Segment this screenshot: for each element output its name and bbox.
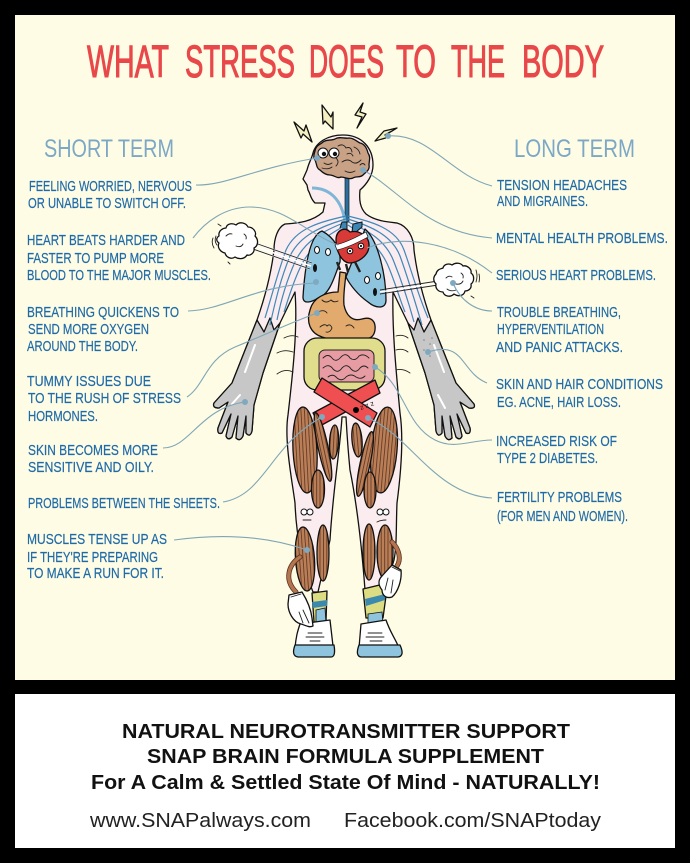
text: skin becomes: SKIN BECOMES MORE — [28, 442, 158, 459]
left glove — [288, 592, 313, 627]
footer link: website: www.SNAPalways.com — [89, 809, 311, 832]
footer line: neurotransmitter support: NATURAL NEUROTRANSMITTER SUPPORT — [122, 720, 570, 743]
text: muscles tense: IF THEY'RE PREPARING — [27, 549, 158, 566]
leader lines: short term — [163, 155, 338, 553]
text: heart beats: HEART BEATS HARDER AND — [27, 232, 185, 249]
text: tension headaches — [497, 177, 627, 210]
icon: lightning bolts — [294, 103, 397, 142]
footer link: facebook: Facebook.com/SNAPtoday — [344, 809, 602, 832]
text: heart beats: FASTER TO PUMP MORE — [27, 250, 164, 267]
text: tension headaches: AND MIGRAINES. — [497, 193, 588, 210]
left forearm: grey skin — [214, 318, 280, 440]
title: STRESS — [185, 36, 295, 87]
lungs — [303, 229, 386, 307]
text: breathing quickens: SEND MORE OXYGEN — [28, 321, 149, 338]
right shoe — [357, 620, 402, 657]
text: skin and hair: EG. ACNE, HAIR LOSS. — [497, 394, 621, 411]
text: skin and hair — [496, 376, 663, 411]
panel: white footer — [15, 694, 675, 848]
text: type 2 diabetes: INCREASED RISK OF — [496, 433, 617, 450]
heading: short term: SHORT TERM — [44, 135, 174, 163]
icon: small intestine — [319, 350, 374, 382]
text: type 2 diabetes — [496, 433, 617, 467]
text: tummy issues: HORMONES. — [28, 408, 98, 425]
title: DOES — [309, 36, 384, 87]
icon: right breath cloud — [434, 263, 480, 298]
text: problems between the sheets: PROBLEMS BETWEEN THE SHEETS. — [28, 495, 220, 512]
text: trouble breathing — [496, 304, 623, 356]
text: tummy issues: TO THE RUSH OF STRESS — [28, 390, 181, 407]
left shoe — [294, 620, 335, 657]
icon: colon — [304, 338, 385, 390]
text: tension headaches: TENSION HEADACHES — [497, 177, 627, 194]
footer line: calm state: For A Calm & Settled State Of Mind - NATURALLY! — [91, 771, 600, 794]
icon: brain — [314, 138, 370, 179]
footer line: snap brain formula: SNAP BRAIN FORMULA SUPPLEMENT — [147, 745, 544, 768]
right sock — [363, 584, 386, 624]
body figure — [212, 103, 479, 657]
heading: long term: LONG TERM — [514, 135, 635, 163]
stress wrinkle marks — [277, 335, 432, 374]
panel: cream poster — [15, 15, 675, 680]
text: feeling worried: FEELING WORRIED, NERVOUS — [29, 178, 192, 195]
text: feeling worried: OR UNABLE TO SWITCH OFF. — [28, 195, 186, 212]
text: trouble breathing: HYPERVENTILATION — [497, 321, 604, 338]
icon: red cross: z z z — [359, 400, 376, 412]
text: fertility — [497, 489, 628, 525]
text: heart beats — [27, 232, 211, 284]
text: muscles tense: TO MAKE A RUN FOR IT. — [27, 565, 164, 582]
text: type 2 diabetes: TYPE 2 DIABETES. — [497, 450, 598, 467]
text: heart beats: BLOOD TO THE MAJOR MUSCLES. — [27, 267, 211, 284]
text: muscles tense — [27, 531, 167, 582]
knee faces — [301, 509, 389, 522]
text: breathing quickens: AROUND THE BODY. — [27, 338, 138, 355]
title: BODY — [522, 36, 604, 87]
leader lines: long term — [360, 133, 492, 498]
text: breathing quickens: BREATHING QUICKENS TO — [27, 304, 179, 321]
icon: left breath cloud — [212, 223, 258, 264]
icon: heart — [335, 222, 369, 272]
title: THE — [451, 36, 505, 87]
left sock — [312, 591, 327, 624]
text: skin becomes — [28, 442, 158, 476]
text: tummy issues: TUMMY ISSUES DUE — [27, 373, 151, 390]
thigh and calf muscles — [289, 406, 401, 592]
text: trouble breathing: AND PANIC ATTACKS. — [496, 339, 623, 356]
text: feeling worried — [28, 178, 192, 212]
icon: stomach — [308, 272, 375, 340]
text: fertility: FERTILITY PROBLEMS — [497, 489, 622, 506]
icon: red cross — [313, 378, 380, 427]
title — [87, 36, 604, 87]
right glove — [379, 565, 401, 598]
text: skin becomes: SENSITIVE AND OILY. — [28, 459, 154, 476]
title: TO — [396, 36, 436, 87]
forearm highlights — [232, 345, 445, 408]
text: muscles tense: MUSCLES TENSE UP AS — [27, 531, 167, 548]
right forearm: grey skin — [408, 318, 474, 440]
nerves: spinal cord and branches — [265, 178, 428, 325]
text: tummy issues — [27, 373, 181, 425]
text: breathing quickens — [27, 304, 179, 355]
text: trouble breathing: TROUBLE BREATHING, — [497, 304, 621, 321]
body silhouette — [214, 135, 474, 592]
breath streams — [253, 243, 438, 294]
title: WHAT — [87, 36, 169, 87]
text: fertility: (FOR MEN AND WOMEN). — [497, 508, 628, 525]
